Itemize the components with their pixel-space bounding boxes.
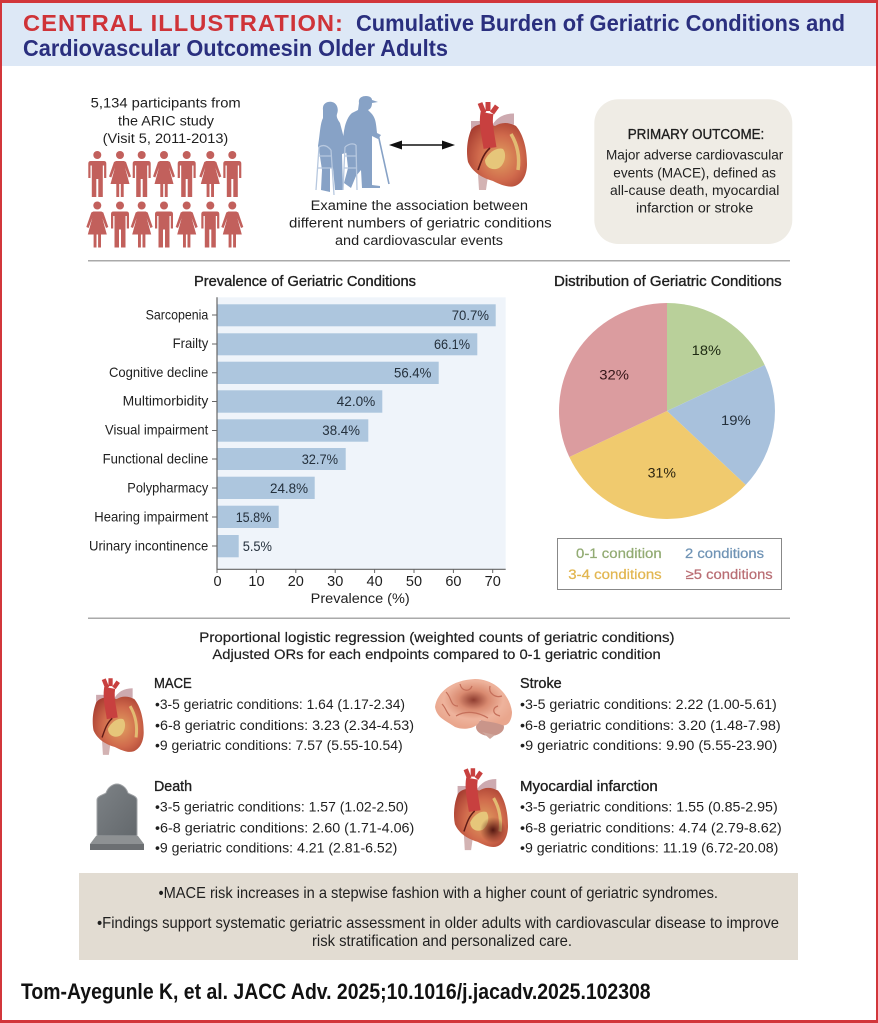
MACE results: •9 geriatric conditions: 7.57 (5.55-10.54): [155, 738, 403, 754]
bars: [217, 304, 496, 557]
Death results: [154, 779, 414, 857]
Myocardial infarction results: [520, 779, 782, 857]
value labels: 15.8%: [236, 510, 271, 525]
title: CENTRAL ILLUSTRATION:: [23, 10, 344, 36]
value labels: 24.8%: [270, 481, 308, 496]
regression heading: [199, 630, 675, 663]
Myocardial infarction results: Myocardial infarction: [520, 779, 658, 795]
axis tick labels: 30: [327, 574, 343, 590]
axis tick labels: 50: [406, 574, 422, 590]
association panel: [289, 96, 552, 249]
Death results: Death: [154, 779, 192, 795]
legend: 3-4 conditions: [568, 567, 662, 583]
citation: Tom-Ayegunle K, et al. JACC Adv. 2025;10.1016/j.jacadv.2025.102308: [21, 979, 651, 1004]
Myocardial infarction results: •6-8 geriatric conditions: 4.74 (2.79-8.62): [520, 820, 782, 836]
category labels: Sarcopenia: [146, 308, 209, 322]
value labels: 42.0%: [337, 394, 375, 409]
pie chart: [559, 303, 775, 519]
value labels: 66.1%: [434, 337, 470, 352]
value labels: 5.5%: [243, 539, 272, 554]
finding two: risk stratification and personalized care.: [312, 933, 572, 950]
title: [23, 10, 845, 61]
axis tick labels: 40: [367, 574, 383, 590]
participants text: [91, 96, 241, 147]
participants panel: [86, 96, 243, 248]
panel: MACE: [93, 676, 414, 755]
icon: heart: [93, 678, 144, 755]
participants text: (Visit 5, 2011-2013): [103, 131, 228, 147]
axis tick labels: 60: [445, 574, 461, 590]
association text: Examine the association between: [311, 198, 528, 214]
Death results: •3-5 geriatric conditions: 1.57 (1.02-2.50): [155, 800, 408, 816]
axis tick labels: 10: [248, 574, 265, 590]
association text: [289, 198, 552, 249]
finding two: •Findings support systematic geriatric assessment in older adults with cardiovascular disease to improve: [97, 915, 779, 932]
pie chart: 31%: [648, 464, 676, 480]
axis tick labels: 70: [485, 574, 501, 590]
legend: 2 conditions: [685, 546, 764, 562]
participants text: the ARIC study: [118, 114, 215, 130]
panel: primary outcome: [594, 99, 792, 244]
header band: [2, 3, 876, 66]
pie chart: 18%: [692, 342, 721, 358]
Death results: •9 geriatric conditions: 4.21 (2.81-6.52): [155, 841, 397, 857]
icon: tombstone: [90, 784, 144, 850]
axes: [212, 297, 506, 573]
finding one: •MACE risk increases in a stepwise fashion with a higher count of geriatric syndromes.: [158, 885, 718, 902]
axis tick labels: 0: [213, 574, 222, 590]
finding two: [97, 915, 779, 950]
icon: group of people: [86, 151, 243, 248]
title: Cardiovascular Outcomesin Older Adults: [23, 35, 448, 61]
panel: key findings: [79, 873, 798, 960]
icon: elderly couple: [316, 96, 389, 195]
MACE results: •3-5 geriatric conditions: 1.64 (1.17-2.34): [155, 697, 405, 713]
category labels: Hearing impairment: [94, 510, 209, 524]
category labels: Urinary incontinence: [89, 538, 208, 553]
pie chart: 19%: [721, 412, 751, 428]
regression heading: Proportional logistic regression (weighted counts of geriatric conditions): [199, 630, 675, 646]
category labels: Cognitive decline: [109, 365, 208, 380]
category labels: Frailty: [173, 336, 208, 351]
chart heading: Prevalence of Geriatric Conditions: [194, 274, 416, 290]
primary outcome heading: PRIMARY OUTCOME:: [628, 127, 764, 143]
panel: prevalence bar chart: [89, 274, 506, 607]
icon: heart: [467, 102, 527, 190]
legend: ≥5 conditions: [686, 567, 773, 583]
participants text: 5,134 participants from: [91, 96, 241, 112]
category labels: Functional decline: [103, 451, 208, 466]
title: Cumulative Burden of Geriatric Conditions and: [356, 10, 845, 36]
panel: Myocardial infarction: [454, 768, 782, 857]
pie chart: 32%: [599, 366, 629, 382]
association text: different numbers of geriatric conditions: [289, 216, 552, 232]
Stroke results: [520, 676, 781, 754]
icon: brain: [435, 679, 512, 739]
pie heading: Distribution of Geriatric Conditions: [554, 274, 782, 290]
legend: [558, 538, 782, 590]
category labels: Multimorbidity: [123, 394, 208, 409]
primary outcome text: all-cause death, myocardial: [610, 183, 779, 198]
category labels: [89, 308, 209, 553]
panel: Stroke: [435, 676, 781, 754]
Stroke results: •3-5 geriatric conditions: 2.22 (1.00-5.61): [520, 697, 777, 713]
Stroke results: •6-8 geriatric conditions: 3.20 (1.48-7.98): [520, 718, 781, 734]
MACE results: •6-8 geriatric conditions: 3.23 (2.34-4.53): [155, 718, 414, 734]
primary outcome text: [606, 147, 784, 215]
Stroke results: •9 geriatric conditions: 9.90 (5.55-23.90): [520, 738, 777, 754]
category labels: Visual impairment: [105, 422, 209, 437]
panel: distribution pie chart: [554, 274, 782, 590]
legend: 0-1 condition: [576, 546, 662, 562]
MACE results: MACE: [154, 676, 192, 692]
axis title: Prevalence (%): [311, 591, 410, 607]
Stroke results: Stroke: [520, 676, 562, 692]
value labels: 38.4%: [322, 423, 360, 438]
Death results: •6-8 geriatric conditions: 2.60 (1.71-4.06): [155, 820, 414, 836]
value labels: 56.4%: [394, 366, 431, 380]
primary outcome text: infarction or stroke: [636, 200, 754, 215]
category labels: Polypharmacy: [127, 480, 208, 495]
value labels: [236, 308, 489, 554]
Myocardial infarction results: •3-5 geriatric conditions: 1.55 (0.85-2.95): [520, 800, 778, 816]
primary outcome text: events (MACE), defined as: [613, 165, 776, 180]
MACE results: [154, 676, 414, 754]
regression heading: Adjusted ORs for each endpoints compared to 0-1 geriatric condition: [212, 647, 661, 663]
association text: and cardiovascular events: [335, 233, 503, 249]
panel: Death: [90, 779, 414, 857]
axis tick labels: 20: [288, 574, 304, 590]
plot background: [217, 297, 506, 569]
value labels: 32.7%: [302, 452, 338, 467]
arrow: association: [389, 140, 455, 150]
value labels: 70.7%: [452, 308, 489, 323]
Myocardial infarction results: •9 geriatric conditions: 11.19 (6.72-20.08): [520, 841, 778, 857]
primary outcome text: Major adverse cardiovascular: [606, 147, 784, 162]
icon: infarcted heart: [454, 768, 508, 850]
axis tick labels: [213, 574, 501, 590]
